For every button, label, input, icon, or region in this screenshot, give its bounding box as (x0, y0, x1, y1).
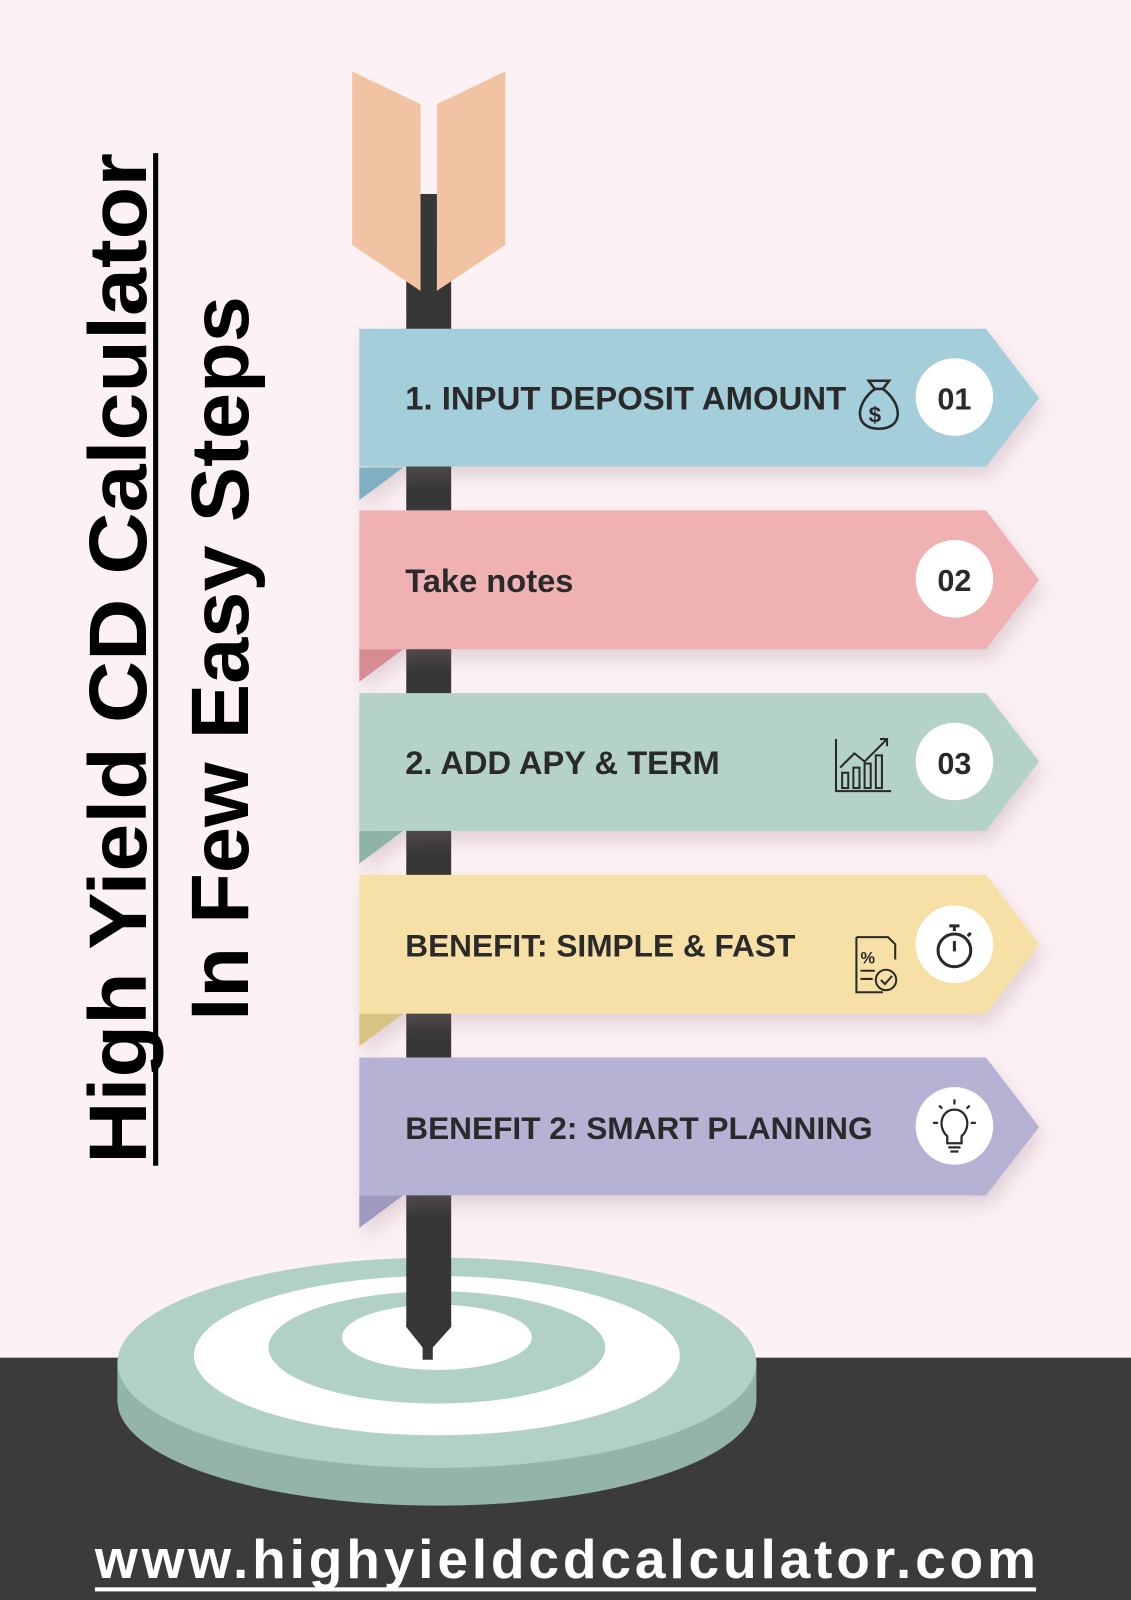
icon: light bulb (933, 1099, 976, 1151)
banner 3 (359, 693, 1039, 864)
floor (0, 1358, 1131, 1600)
website url: www.highyieldcdcalculator.com (94, 1528, 1036, 1590)
banner 3: 2. ADD APY & TERM (405, 744, 720, 781)
icon: document (856, 937, 896, 992)
arrow shaft (406, 194, 451, 1360)
arrow fletching (352, 71, 505, 291)
banner 2: Take notes (405, 562, 573, 599)
icon: money bag (860, 381, 898, 429)
banner 1 (359, 329, 1039, 500)
banner 5: BENEFIT 2: SMART PLANNING (405, 1110, 873, 1146)
banner 1: 1. INPUT DEPOSIT AMOUNT (405, 379, 846, 416)
icon: money bag: $ (869, 403, 882, 428)
banner 2: 02 (937, 564, 971, 598)
banner 5 (359, 1058, 1039, 1228)
title: High Yield CD Calculator (73, 153, 164, 1164)
banner 1: 01 (937, 382, 971, 416)
icon: document: % (860, 950, 875, 968)
icon: stopwatch (938, 926, 971, 967)
banner 4 (359, 875, 1039, 1046)
banner 4: BENEFIT: SIMPLE & FAST (405, 927, 795, 963)
banner 3: 03 (937, 747, 971, 781)
title: In Few Easy Steps (175, 296, 266, 1021)
banner 2 (359, 510, 1039, 682)
title (73, 153, 266, 1166)
target (117, 1258, 756, 1506)
icon: chart (836, 739, 891, 791)
